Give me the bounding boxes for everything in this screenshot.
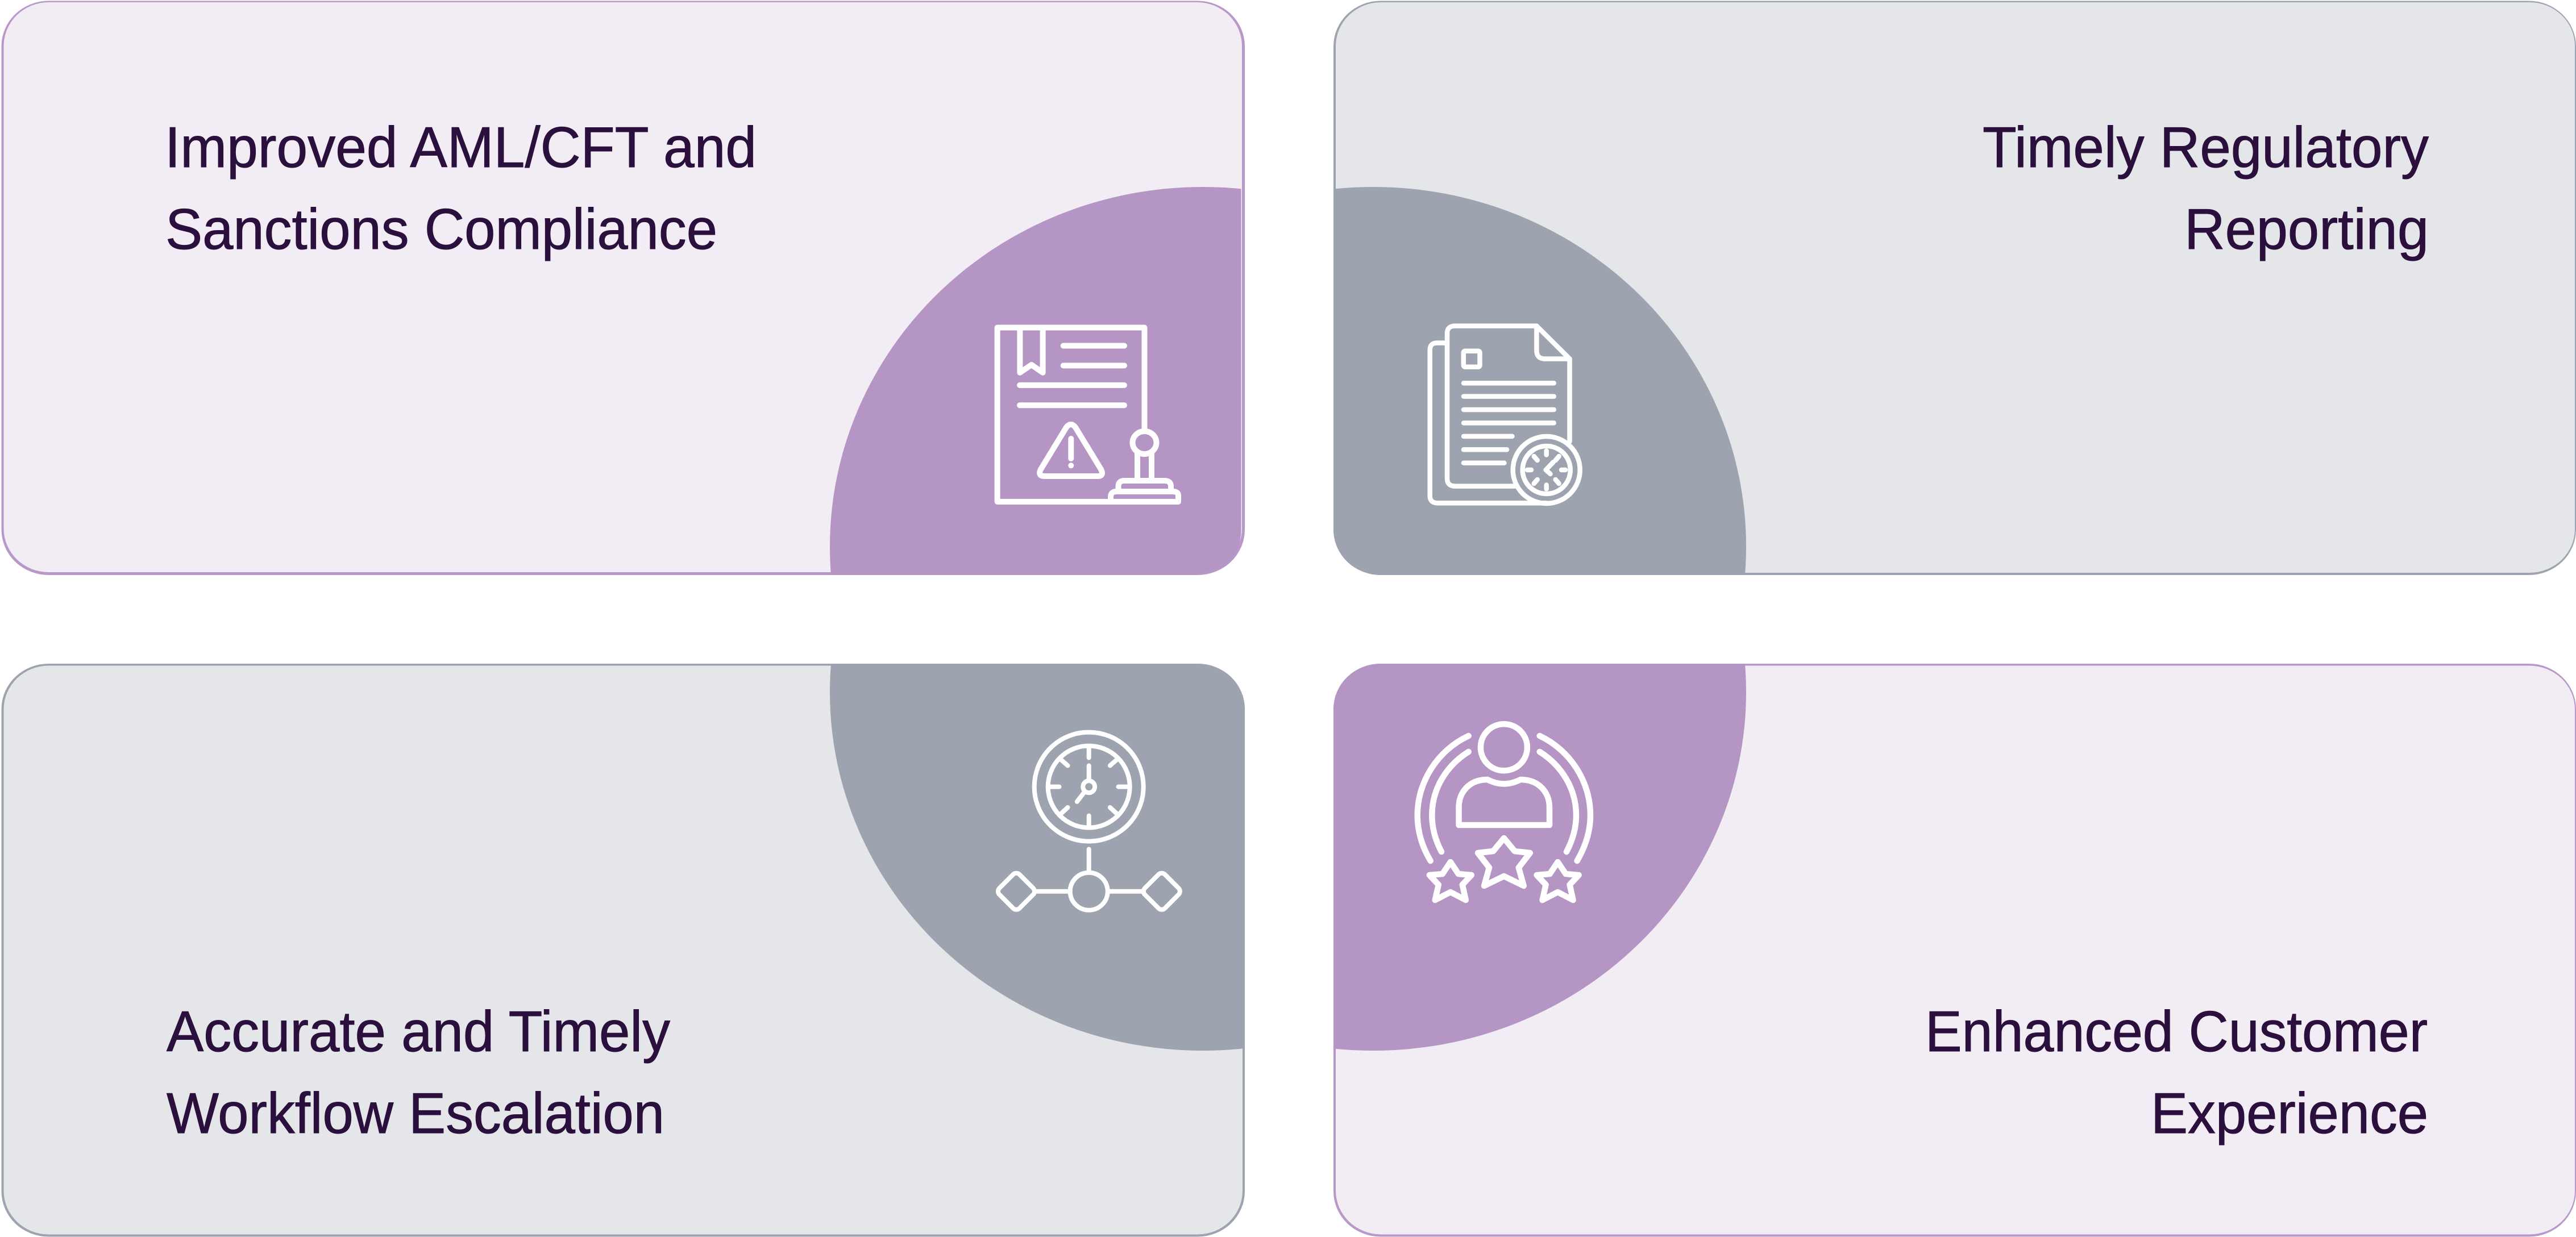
heading: Improved AML/CFT and bbox=[165, 116, 757, 180]
heading: Enhanced Customer bbox=[1925, 1000, 2428, 1064]
panel: timely regulatory reporting bbox=[1333, 1, 2576, 575]
card background bbox=[1333, 664, 2576, 1236]
icon: regulation document with warning and stamp bbox=[998, 327, 1178, 502]
quarter ellipse accent bbox=[1333, 664, 1746, 1051]
heading: Experience bbox=[2151, 1082, 2428, 1146]
icon: clock with workflow nodes bbox=[996, 732, 1182, 911]
quarter ellipse accent bbox=[1333, 187, 1746, 575]
heading bbox=[1983, 116, 2429, 261]
heading: Timely Regulatory bbox=[1983, 116, 2429, 180]
card background bbox=[1, 664, 1245, 1236]
card background bbox=[1333, 1, 2576, 575]
heading bbox=[1925, 1000, 2428, 1146]
heading: Reporting bbox=[2184, 198, 2429, 261]
heading: Accurate and Timely bbox=[167, 1000, 670, 1064]
card background bbox=[1, 1, 1245, 575]
quarter ellipse accent bbox=[830, 187, 1241, 572]
heading: Workflow Escalation bbox=[167, 1082, 664, 1146]
quarter ellipse accent bbox=[830, 664, 1245, 1051]
panel: accurate and timely workflow escalation bbox=[1, 664, 1245, 1236]
icon: documents with clock bbox=[1430, 326, 1580, 503]
panel: AML/CFT and sanctions compliance bbox=[1, 1, 1245, 575]
icon: customer with stars bbox=[1418, 724, 1590, 900]
heading bbox=[167, 1000, 670, 1146]
heading: Sanctions Compliance bbox=[165, 198, 717, 261]
heading bbox=[165, 116, 757, 261]
panel: enhanced customer experience bbox=[1333, 664, 2576, 1236]
